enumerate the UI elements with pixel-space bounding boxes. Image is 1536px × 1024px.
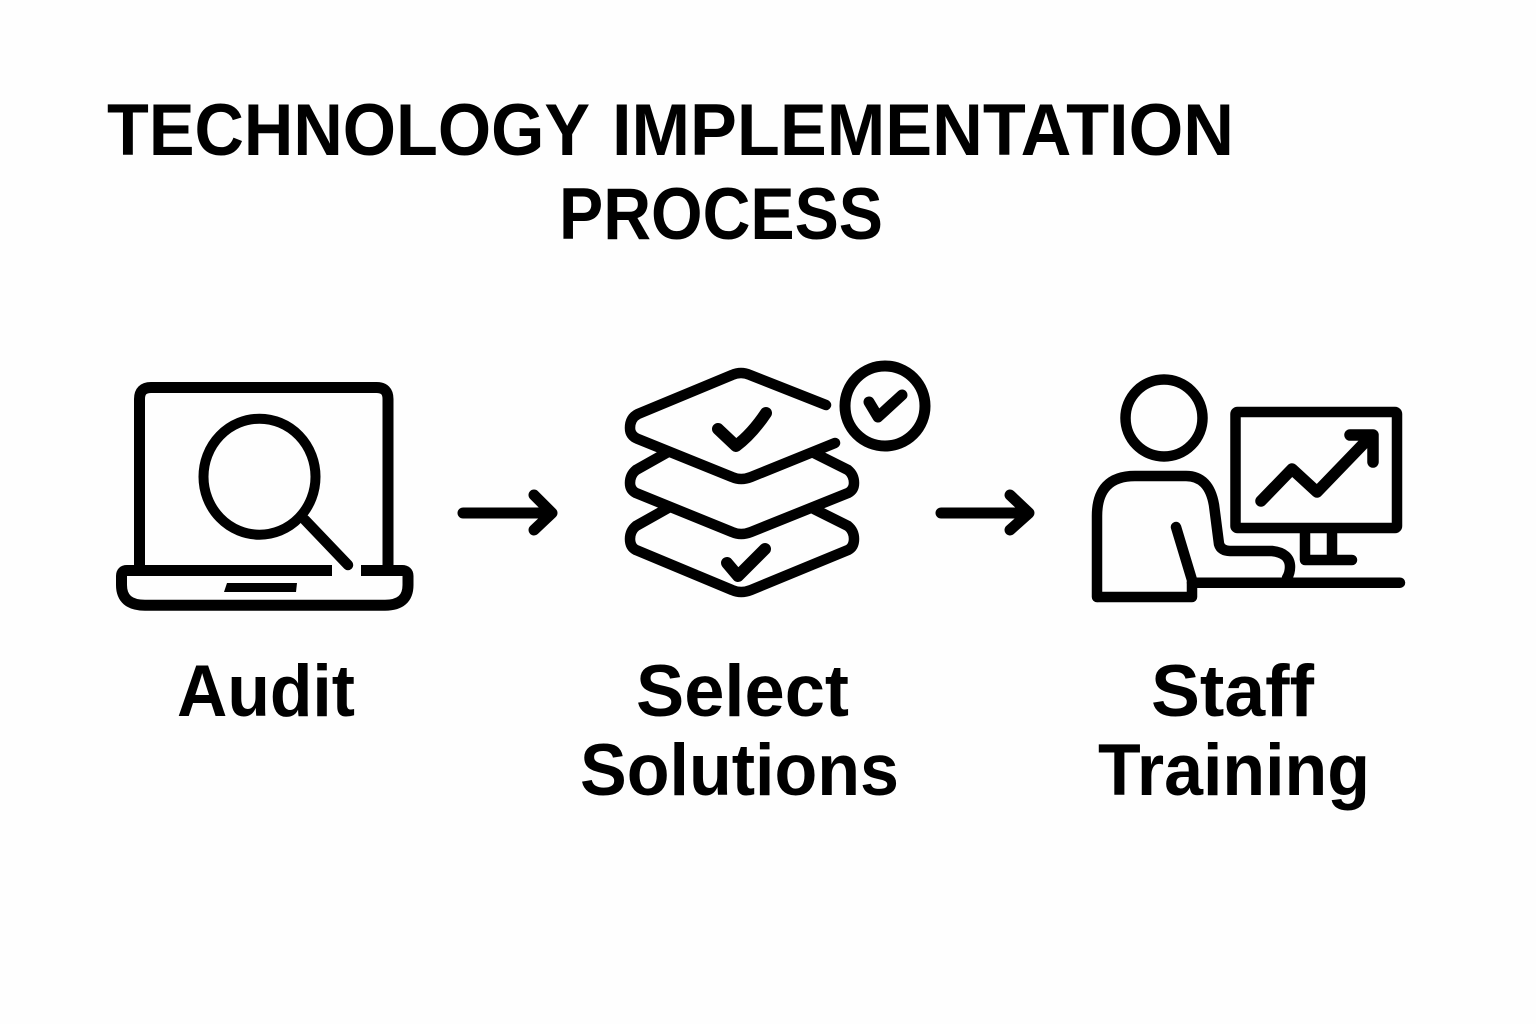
body xyxy=(1097,476,1290,597)
label: select solutions xyxy=(580,651,899,811)
icon: person at monitor xyxy=(1097,380,1400,597)
arrow: select solutions to staff training xyxy=(941,495,1029,530)
label: staff training xyxy=(1098,651,1370,811)
badge: circled check xyxy=(845,366,925,446)
bottom layer xyxy=(630,508,854,592)
rising trend line xyxy=(1261,435,1373,501)
arrow: audit to select solutions xyxy=(463,495,552,530)
icon: stacked layers with check marks xyxy=(630,366,925,592)
head xyxy=(1126,380,1202,456)
top layer xyxy=(630,373,835,479)
label: select solutions: Solutions xyxy=(580,730,899,811)
label: staff training: Staff xyxy=(1151,651,1315,732)
title: PROCESS xyxy=(559,174,883,255)
monitor stand xyxy=(1305,533,1352,560)
title: TECHNOLOGY xyxy=(107,90,590,171)
check mark: bottom layer xyxy=(727,549,765,576)
icon: laptop with magnifying glass xyxy=(122,388,408,605)
title: IMPLEMENTATION xyxy=(612,90,1234,171)
monitor xyxy=(1236,412,1397,528)
check mark: top layer xyxy=(718,413,766,446)
middle layer xyxy=(630,452,854,534)
label: staff training: Training xyxy=(1098,730,1370,811)
title xyxy=(107,90,1234,255)
label: audit: Audit xyxy=(177,651,355,732)
desk xyxy=(1192,577,1400,588)
label: select solutions: Select xyxy=(636,651,849,732)
